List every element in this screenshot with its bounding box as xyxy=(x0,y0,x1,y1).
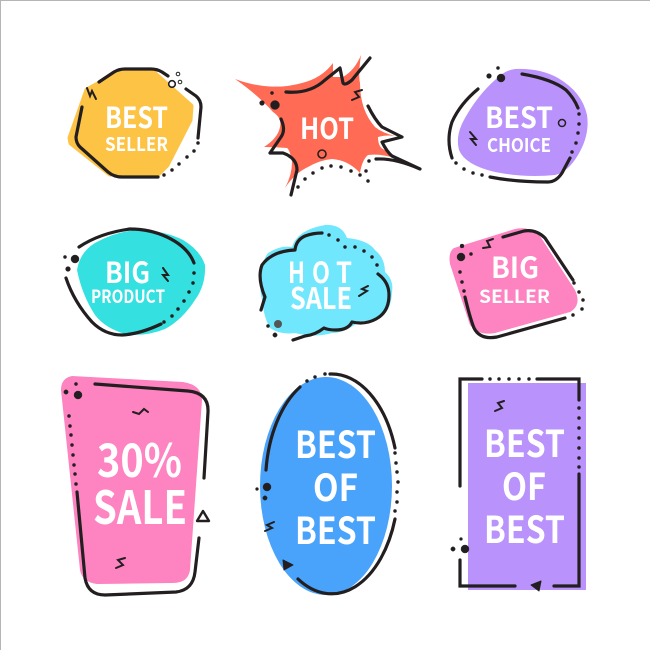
label: BEST xyxy=(105,95,168,137)
badge: best choice xyxy=(449,66,588,182)
zigzag icon xyxy=(265,522,274,531)
zigzag bottom xyxy=(116,558,125,568)
badge: 30% sale xyxy=(61,376,209,595)
label: OF xyxy=(313,458,358,512)
zigzag icon xyxy=(470,132,476,145)
badge: big seller xyxy=(450,228,585,338)
badge: hot xyxy=(235,55,420,195)
outline strokes xyxy=(449,74,578,182)
dots and rings xyxy=(162,72,200,177)
zigzag icon xyxy=(352,90,362,100)
label: SALE xyxy=(290,274,352,318)
outline strokes xyxy=(66,229,194,335)
zigzag icon xyxy=(359,286,368,296)
teal blob xyxy=(77,230,205,335)
zigzag icon xyxy=(483,239,493,248)
label: BEST xyxy=(295,501,376,555)
dots and rings xyxy=(260,91,371,189)
badge: best of best oval xyxy=(256,372,400,595)
red burst blob xyxy=(235,55,405,188)
outline strokes xyxy=(260,233,389,340)
label: H xyxy=(288,250,305,292)
label xyxy=(288,250,352,318)
label xyxy=(93,425,187,538)
label: BEST xyxy=(295,415,376,469)
label: PRODUCT xyxy=(91,283,165,309)
cyan cloud blob xyxy=(260,225,392,336)
label xyxy=(91,250,165,309)
badge: hot sale xyxy=(260,225,392,340)
label: CHOICE xyxy=(487,131,551,158)
dots xyxy=(64,382,82,486)
outline strokes xyxy=(465,231,573,338)
label: SELLER xyxy=(479,283,550,309)
outline strokes xyxy=(77,384,208,595)
label: BEST xyxy=(484,500,565,554)
label: T xyxy=(336,250,352,292)
outline strokes xyxy=(266,374,395,594)
label xyxy=(105,95,168,157)
label: BEST xyxy=(484,414,565,468)
label xyxy=(485,95,553,158)
purple rectangle blob xyxy=(468,383,586,590)
dots xyxy=(266,233,379,337)
badge: best seller xyxy=(70,69,201,177)
dots xyxy=(457,244,585,317)
label: BIG xyxy=(105,250,150,292)
dots xyxy=(256,372,400,513)
label xyxy=(295,415,376,555)
label: HOT xyxy=(300,106,354,148)
pink trapezoid blob xyxy=(61,376,202,584)
label: BEST xyxy=(485,95,553,137)
label: 30% xyxy=(97,425,182,491)
dots xyxy=(451,377,581,553)
dots xyxy=(63,255,196,324)
label: BIG xyxy=(491,245,539,287)
label xyxy=(484,414,565,554)
zigzag icon xyxy=(87,88,96,99)
label xyxy=(479,245,550,309)
blue ellipse blob xyxy=(260,377,392,595)
label: O xyxy=(312,250,330,292)
outline strokes xyxy=(270,58,420,195)
outline strokes xyxy=(460,379,579,586)
badge: big product xyxy=(63,229,205,335)
label: OF xyxy=(502,457,546,511)
purple blob xyxy=(458,69,588,176)
zigzag icon xyxy=(163,268,168,281)
dots and rings xyxy=(454,66,581,177)
label: SALE xyxy=(93,472,187,538)
zigzag top xyxy=(133,409,148,414)
yellow octagon blob xyxy=(70,72,191,174)
triangle icon xyxy=(197,511,209,521)
outline strokes xyxy=(76,69,201,177)
triangle icon xyxy=(531,581,541,591)
label: SELLER xyxy=(105,130,168,157)
pink blob xyxy=(450,228,578,334)
badge: best of best rectangle xyxy=(451,377,586,591)
triangle icon xyxy=(283,560,293,570)
zigzag icon xyxy=(495,401,504,411)
